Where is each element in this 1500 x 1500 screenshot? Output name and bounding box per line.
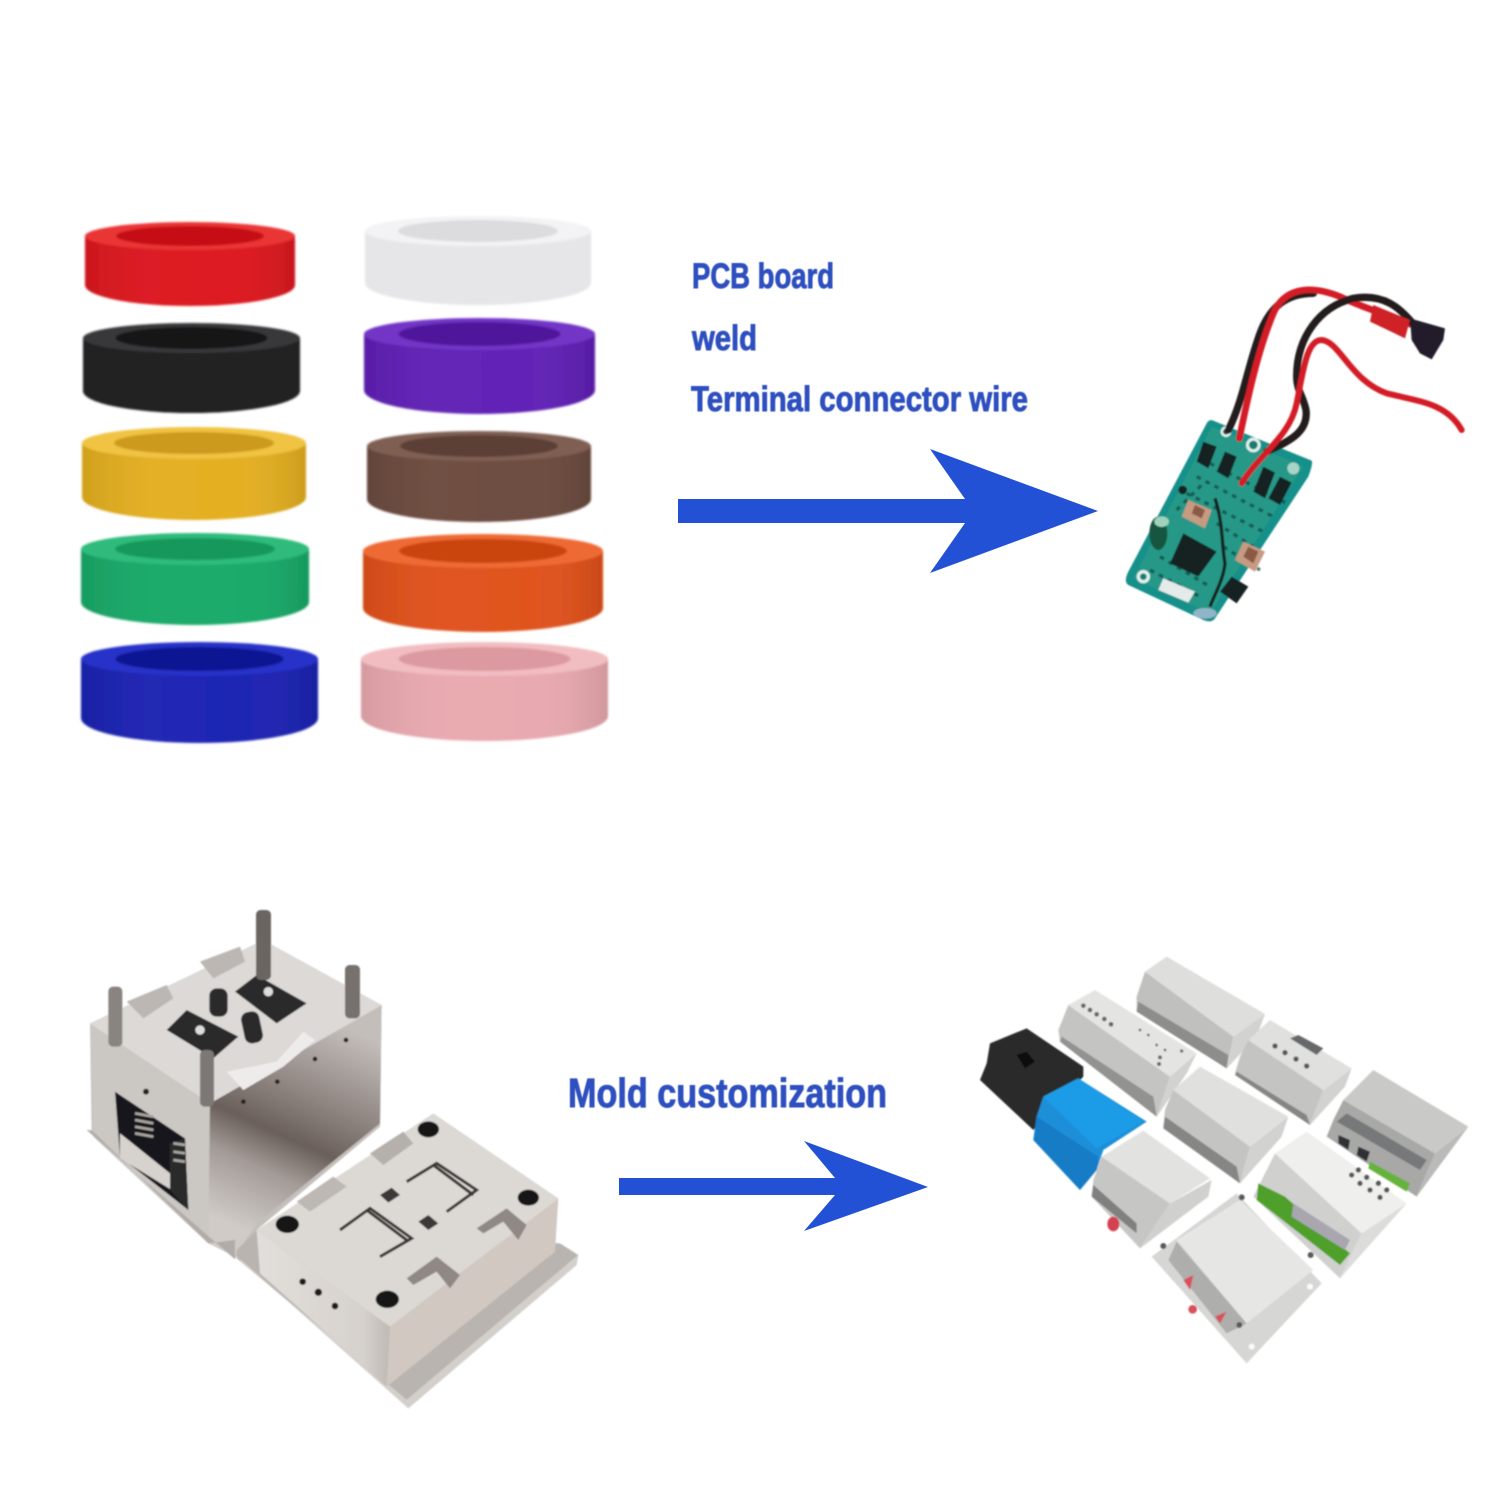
ring: white	[365, 216, 591, 305]
label: Mold customization: Mold customization	[568, 1070, 887, 1116]
text block: PCB services	[691, 257, 1028, 419]
enclosure: small gray	[1092, 1131, 1212, 1248]
pockets	[477, 1208, 527, 1240]
illustration: DIN rail enclosures	[980, 957, 1468, 1363]
lower mold block	[237, 1113, 578, 1408]
ring: yellow	[82, 427, 306, 520]
ring: orange	[363, 534, 603, 632]
ring: brown	[367, 431, 591, 522]
enclosure: center	[1163, 1067, 1288, 1183]
circuit board	[1126, 420, 1312, 621]
ring: purple	[364, 318, 595, 414]
ring: green	[81, 533, 309, 625]
connector	[1370, 305, 1445, 359]
sliders	[127, 985, 173, 1018]
ring: pink	[361, 642, 608, 741]
enclosure: blue	[1033, 1078, 1147, 1190]
wires	[1228, 290, 1462, 483]
illustration: injection mold	[87, 910, 578, 1408]
trace specks	[1150, 463, 1287, 597]
enclosure: display	[1235, 1020, 1352, 1125]
enclosure: with indicator dots	[1058, 990, 1197, 1117]
enclosure: green terminals	[1253, 1132, 1407, 1278]
label: PCB board: PCB board	[692, 257, 834, 296]
ring: black	[83, 323, 300, 413]
components	[1170, 442, 1292, 603]
cavity engraving	[340, 1163, 477, 1257]
enclosure: plain long back	[1137, 957, 1265, 1068]
label: Terminal connector wire: Terminal connector wire	[691, 380, 1028, 419]
ring: blue	[81, 642, 318, 743]
enclosure: dark gray with ports	[1327, 1070, 1468, 1197]
panel: coloured rings	[81, 216, 608, 743]
ring: red	[85, 222, 295, 306]
enclosure: black	[980, 1028, 1083, 1130]
enclosure: front flanged	[1152, 1193, 1322, 1363]
spring window	[115, 1092, 188, 1210]
guide pins	[108, 910, 360, 1107]
upper mold block	[87, 910, 382, 1259]
label: weld: weld	[691, 319, 757, 358]
dark cavities	[167, 975, 307, 1058]
arrow: mold to enclosures	[619, 1141, 928, 1231]
illustration: PCB with wires	[1126, 290, 1462, 621]
arrow: rings to PCB	[678, 449, 1098, 573]
bolt holes	[276, 1121, 539, 1308]
